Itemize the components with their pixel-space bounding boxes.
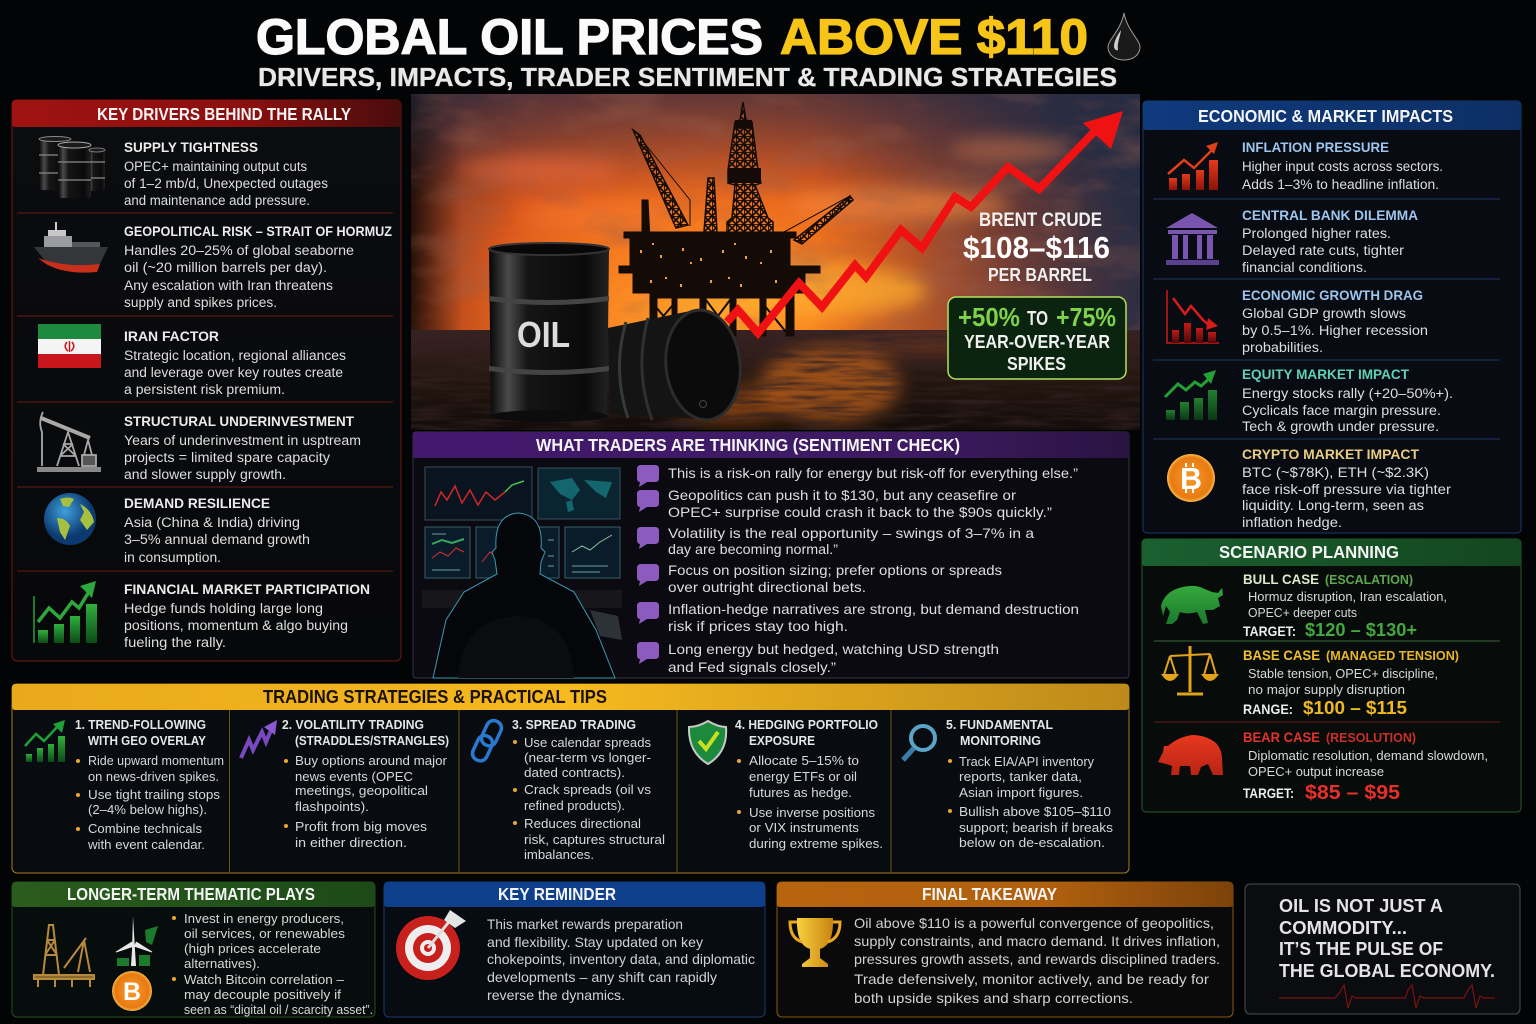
impact: crypto market: BTC (~$78K), ETH (~$2.3K) (1242, 465, 1429, 480)
driver: supply tightness: of 1–2 mb/d, Unexpected outages (124, 176, 328, 191)
strategy 1: trend-following (25, 717, 224, 852)
sentiment quotes (637, 465, 1079, 675)
impact: economic growth drag: by 0.5–1%. Higher recession (1242, 323, 1428, 338)
driver: iran factor: Strategic location, regional alliances (124, 348, 346, 363)
strategy 5: fundamental monitoring: below on de-escalation. (959, 836, 1105, 850)
callout: year-over-year spikes (948, 297, 1126, 379)
title: GLOBAL OIL PRICES (256, 9, 763, 65)
heading: scenario planning: SCENARIO PLANNING (1219, 542, 1399, 562)
strategy 3: spread trading (470, 717, 665, 862)
scenario: base case: no major supply disruption (1248, 683, 1405, 697)
driver: structural underinvestment: projects = limited spare capacity (124, 450, 330, 465)
impact: inflation pressure: INFLATION PRESSURE (1242, 139, 1389, 155)
upright oil barrel: OIL (517, 314, 570, 355)
sentiment quotes: and Fed signals closely.” (668, 659, 836, 675)
callout: year-over-year spikes: SPIKES (1007, 354, 1066, 374)
strategy 2: volatility trading: flashpoints). (295, 800, 369, 814)
driver: supply tightness: OPEC+ maintaining output cuts (124, 159, 307, 174)
scenario: bull case (1161, 571, 1447, 640)
scenario: bull case: $120 – $130+ (1305, 620, 1417, 640)
impact: inflation pressure: Adds 1–3% to headline inflation. (1242, 177, 1439, 192)
driver: geopolitical risk: supply and spikes prices. (124, 295, 277, 310)
icon: scales (1163, 646, 1217, 694)
impact: crypto market: liquidity. Long-term, seen as (1242, 498, 1424, 513)
brent crude price label: $108–$116 (963, 230, 1110, 265)
impact: crypto market: face risk-off pressure via tighter (1242, 482, 1452, 497)
heading: impacts: ECONOMIC & MARKET IMPACTS (1198, 106, 1453, 126)
icon: bull (1161, 586, 1223, 624)
icon: iran flag (38, 324, 101, 368)
quote text: COMMODITY... (1279, 918, 1407, 938)
strategy 4: hedging portfolio exposure: Allocate 5–15% to (749, 754, 859, 768)
strategy 4: hedging portfolio exposure: energy ETFs or oil (749, 770, 857, 784)
sentiment quotes: OPEC+ surprise could crash it back to the $90s quickly.” (668, 504, 1052, 520)
thematic bullet text: may decouple positively if (184, 988, 342, 1002)
icon: tanker ship (34, 222, 108, 273)
strategy 5: fundamental monitoring: support; bearish if breaks (959, 821, 1113, 835)
driver: demand resilience (44, 493, 310, 565)
driver: iran factor: a persistent risk premium. (124, 382, 285, 397)
driver: structural underinvestment (37, 412, 361, 482)
driver: structural underinvestment: Years of underinvestment in usptream (124, 433, 361, 448)
icon: gold oil rig (34, 925, 94, 987)
quote text: IT’S THE PULSE OF (1279, 939, 1443, 959)
icon: bitcoin coin: B (1180, 461, 1202, 496)
scenario: bear case: OPEC+ output increase (1248, 765, 1384, 779)
strategy 1: trend-following: (2–4% below highs). (88, 803, 207, 817)
strategy 4: hedging portfolio exposure: 4. HEDGING PORTFOLIO (735, 717, 878, 732)
strategy 1: trend-following: Use tight trailing stops (88, 788, 220, 802)
scenario: bull case: Hormuz disruption, Iran escalation, (1248, 590, 1447, 604)
impact: economic growth drag: probabilities. (1242, 340, 1323, 355)
strategy 4: hedging portfolio exposure: futures as hedge. (749, 786, 852, 800)
panel: economic and market impacts (1143, 101, 1521, 533)
icon: green chart (25, 720, 65, 762)
strategy 3: spread trading: refined products). (524, 799, 625, 813)
icon: trophy (790, 918, 840, 967)
takeaway text: pressures growth assets, and rewards disciplined traders. (854, 951, 1220, 967)
strategy 2: volatility trading (241, 717, 449, 850)
brent crude price label: BRENT CRUDE (979, 210, 1102, 231)
strategy 5: fundamental monitoring: reports, tanker data, (959, 770, 1082, 784)
driver: demand resilience: 3–5% annual demand growth (124, 532, 310, 547)
driver: supply tightness: and maintenance add pressure. (124, 193, 310, 208)
panel: scenario planning (1142, 539, 1521, 812)
thematic bullet text: alternatives). (184, 957, 260, 971)
title: ABOVE $110 (780, 9, 1088, 65)
callout: year-over-year spikes: YEAR-OVER-YEAR (964, 332, 1110, 352)
scenario: bull case: BULL CASE (1243, 571, 1319, 587)
driver: iran factor: IRAN FACTOR (124, 328, 219, 344)
title (256, 9, 1088, 65)
icon: bitcoin coin (112, 971, 152, 1011)
quote text: OIL IS NOT JUST A (1279, 896, 1443, 916)
strategy 4: hedging portfolio exposure: during extreme spikes. (749, 837, 883, 851)
scenario: bear case (1158, 729, 1488, 804)
icon: wind turbine (116, 916, 158, 966)
panel: key drivers (12, 100, 401, 661)
icon: shield (689, 721, 726, 764)
heading: thematic plays: LONGER-TERM THEMATIC PLAYS (67, 884, 315, 904)
strategy 2: volatility trading: Buy options around major (295, 754, 447, 768)
pulse line (1279, 985, 1495, 1008)
impact: central bank dilemma: Prolonged higher rates. (1242, 226, 1391, 241)
reminder text (487, 916, 755, 1003)
heading: final takeaway: FINAL TAKEAWAY (922, 884, 1057, 904)
driver: geopolitical risk: oil (~20 million barrels per day). (124, 260, 327, 275)
panel: longer-term thematic plays (12, 882, 375, 1017)
strategy 5: fundamental monitoring (903, 717, 1113, 850)
sentiment quotes: Geopolitics can push it to $130, but any ceasefire or (668, 487, 1016, 503)
impact: crypto market: CRYPTO MARKET IMPACT (1242, 446, 1419, 462)
strategy 5: fundamental monitoring: Bullish above $105–$110 (959, 805, 1111, 819)
sentiment quotes: risk if prices stay too high. (668, 618, 848, 634)
driver: geopolitical risk (34, 222, 392, 310)
impact: equity market: Tech & growth under pressure. (1242, 419, 1439, 434)
strategy 2: volatility trading: in either direction. (295, 836, 407, 850)
scenario: bear case: (RESOLUTION) (1326, 731, 1416, 745)
panel: key reminder (384, 882, 765, 1017)
scenario: bear case: TARGET: (1243, 785, 1294, 801)
thematic bullet text: Watch Bitcoin correlation – (184, 973, 344, 987)
impact: central bank dilemma: CENTRAL BANK DILEMMA (1242, 207, 1418, 223)
scenario: base case: RANGE: (1243, 701, 1293, 717)
fallen oil barrel (608, 306, 746, 424)
icon: rising green chart (1165, 370, 1217, 420)
driver: geopolitical risk: GEOPOLITICAL RISK – STRAIT OF HORMUZ (124, 223, 392, 239)
reminder text: and flexibility. Stay updated on key (487, 934, 703, 950)
rig silhouette (619, 102, 853, 336)
strategy 2: volatility trading: meetings, geopolitical (295, 784, 428, 798)
strategy 5: fundamental monitoring: MONITORING (960, 733, 1041, 748)
strategy 1: trend-following: Ride upward momentum (88, 754, 224, 768)
thematic bullet text: Invest in energy producers, (184, 912, 344, 926)
sentiment quotes: Volatility is the real opportunity – swings of 3–7% in a (668, 525, 1034, 541)
impact: equity market: EQUITY MARKET IMPACT (1242, 366, 1409, 382)
reminder text: reverse the dynamics. (487, 987, 625, 1003)
driver: supply tightness (39, 136, 328, 208)
heading: sentiment: WHAT TRADERS ARE THINKING (SENTIMENT CHECK) (536, 435, 960, 455)
scenario: base case: Stable tension, OPEC+ discipline, (1248, 667, 1438, 681)
subtitle: DRIVERS, IMPACTS, TRADER SENTIMENT & TRADING STRATEGIES (258, 62, 1117, 92)
driver: supply tightness: SUPPLY TIGHTNESS (124, 139, 258, 155)
impact: economic growth drag: ECONOMIC GROWTH DRAG (1242, 287, 1423, 303)
strategy 3: spread trading: Crack spreads (oil vs (524, 783, 651, 797)
icon: chain link (470, 718, 504, 763)
heading: key drivers: KEY DRIVERS BEHIND THE RALLY (97, 104, 351, 124)
strategy 3: spread trading: Use calendar spreads (524, 736, 651, 750)
strategy 4: hedging portfolio exposure: or VIX instruments (749, 821, 859, 835)
icon: magnifier (903, 726, 935, 760)
scenario: bear case: $85 – $95 (1305, 782, 1400, 804)
strategy 1: trend-following: 1. TREND-FOLLOWING (75, 717, 206, 732)
impact: equity market (1165, 366, 1453, 434)
icon: purple zigzag (241, 720, 277, 758)
scenario: bear case: Diplomatic resolution, demand slowdown, (1248, 749, 1488, 763)
driver: iran factor: and leverage over key routes create (124, 365, 343, 380)
icon: falling chart (1167, 290, 1219, 343)
panel: final takeaway (777, 882, 1233, 1017)
scenario: base case: BASE CASE (1243, 647, 1320, 663)
strategy 4: hedging portfolio exposure (689, 717, 883, 851)
driver: demand resilience: Asia (China & India) driving (124, 515, 300, 530)
strategy 3: spread trading: (near-term vs longer- (524, 751, 651, 765)
strategy 2: volatility trading: Profit from big moves (295, 820, 427, 834)
takeaway text (854, 915, 1220, 1006)
panel: sentiment check (413, 432, 1129, 678)
scenario: bear case: BEAR CASE (1243, 729, 1320, 745)
strategy 1: trend-following: on news-driven spikes. (88, 770, 219, 784)
strategy 1: trend-following: with event calendar. (87, 838, 205, 852)
reminder text: developments – any shift can rapidly (487, 969, 717, 985)
driver: financial market participation: FINANCIAL MARKET PARTICIPATION (124, 581, 370, 597)
strategy 3: spread trading: dated contracts). (524, 766, 625, 780)
impact: central bank dilemma (1166, 207, 1418, 275)
impact: equity market: Energy stocks rally (+20–50%+). (1242, 386, 1453, 401)
heading: key reminder: KEY REMINDER (498, 884, 616, 904)
callout: year-over-year spikes: +75% (1056, 302, 1116, 332)
strategy 3: spread trading: 3. SPREAD TRADING (512, 717, 636, 732)
takeaway text: Oil above $110 is a powerful convergence of geopolitics, (854, 915, 1214, 931)
quote text: THE GLOBAL ECONOMY. (1279, 961, 1495, 981)
reminder text: This market rewards preparation (487, 916, 683, 932)
impact: inflation pressure (1168, 139, 1443, 192)
impact: economic growth drag (1167, 287, 1428, 355)
scenario: bull case: TARGET: (1243, 623, 1296, 639)
driver: iran factor (38, 324, 346, 397)
thematic bullet text (172, 912, 373, 1017)
illustration: trader at monitors (422, 467, 622, 678)
upright oil barrel (489, 243, 609, 422)
strategy 2: volatility trading: 2. VOLATILITY TRADING (282, 717, 424, 732)
strategy 2: volatility trading: (STRADDLES/STRANGLES) (295, 733, 449, 748)
quote text (1279, 896, 1495, 981)
icon: bank building (1166, 213, 1219, 265)
icon: pumpjack (37, 412, 101, 472)
scenario: base case: $100 – $115 (1303, 698, 1407, 718)
takeaway text: both upside spikes and sharp corrections. (854, 990, 1133, 1006)
impact: equity market: Cyclicals face margin pressure. (1242, 403, 1441, 418)
strategy 4: hedging portfolio exposure: EXPOSURE (749, 733, 815, 748)
strategy 3: spread trading: Reduces directional (524, 817, 641, 831)
strategy 2: volatility trading: news events (OPEC (295, 770, 413, 784)
heading: trading strategies: TRADING STRATEGIES & PRACTICAL TIPS (263, 687, 607, 707)
thematic bullet text: oil services, or renewables (184, 927, 345, 941)
strategy 1: trend-following: Combine technicals (88, 822, 202, 836)
icon: globe (44, 493, 96, 545)
impact: crypto market (1167, 446, 1452, 530)
driver: structural underinvestment: STRUCTURAL UNDERINVESTMENT (124, 413, 354, 429)
icon: barrels (39, 136, 105, 198)
thematic bullet text: seen as “digital oil / scarcity asset”. (184, 1003, 373, 1017)
strategy 5: fundamental monitoring: 5. FUNDAMENTAL (946, 717, 1053, 732)
scenario: base case (1163, 646, 1459, 718)
strategy 3: spread trading: imbalances. (524, 848, 594, 862)
strategy 1: trend-following: WITH GEO OVERLAY (88, 733, 206, 748)
icon: bitcoin coin (1167, 454, 1215, 502)
driver: geopolitical risk: Any escalation with Iran threatens (124, 278, 333, 293)
icon: bitcoin coin: B (123, 978, 141, 1006)
sentiment quotes: day are becoming normal.” (668, 541, 838, 557)
arrow: rising price line (727, 111, 1123, 333)
driver: structural underinvestment: and slower supply growth. (124, 467, 286, 482)
icon: target and dart (396, 910, 466, 980)
panel: pulse quote (1245, 884, 1520, 1014)
driver: demand resilience: DEMAND RESILIENCE (124, 495, 270, 511)
strategy 5: fundamental monitoring: Asian import figures. (959, 786, 1083, 800)
impact: inflation pressure: Higher input costs across sectors. (1242, 159, 1443, 174)
scenario: bull case: OPEC+ deeper cuts (1248, 606, 1357, 620)
hero image: offshore rig at sunset (411, 94, 1140, 430)
sentiment quotes: This is a risk-on rally for energy but risk-off for everything else.” (668, 465, 1078, 481)
sentiment quotes: Long energy but hedged, watching USD strength (668, 641, 999, 657)
scenario: bull case: (ESCALATION) (1325, 573, 1413, 587)
icon: oil drop (1108, 13, 1140, 60)
brent crude price label (963, 210, 1110, 285)
driver: financial market participation: Hedge funds holding large long (124, 601, 323, 616)
callout: year-over-year spikes: +50% (958, 302, 1020, 332)
driver: financial market participation: positions, momentum & algo buying (124, 618, 348, 633)
impact: economic growth drag: Global GDP growth slows (1242, 306, 1406, 321)
takeaway text: supply constraints, and macro demand. It drives inflation, (854, 933, 1220, 949)
strategy 4: hedging portfolio exposure: Use inverse positions (749, 806, 875, 820)
thematic bullet text: (high prices accelerate (184, 942, 321, 956)
brent crude price label: PER BARREL (988, 265, 1092, 285)
scenario: base case: (MANAGED TENSION) (1326, 649, 1459, 663)
strategy 5: fundamental monitoring: Track EIA/API inventory (959, 755, 1095, 769)
panel: trading strategies (12, 684, 1129, 873)
sentiment quotes: Inflation-hedge narratives are strong, but demand destruction (668, 601, 1079, 617)
impact: crypto market: inflation hedge. (1242, 515, 1342, 530)
driver: financial market participation (33, 581, 370, 650)
strategy 3: spread trading: risk, captures structural (524, 833, 665, 847)
sentiment quotes: Focus on position sizing; prefer options or spreads (668, 562, 1002, 578)
impact: central bank dilemma: Delayed rate cuts, tighter (1242, 243, 1405, 258)
reminder text: chokepoints, inventory data, and diplomatic (487, 951, 755, 967)
icon: rising red chart (1168, 142, 1218, 190)
driver: demand resilience: in consumption. (124, 550, 221, 565)
callout: year-over-year spikes: TO (1027, 308, 1048, 330)
impact: central bank dilemma: financial conditions. (1242, 260, 1367, 275)
icon: growth chart (33, 581, 97, 643)
driver: financial market participation: fueling the rally. (124, 635, 226, 650)
sentiment quotes: over outright directional bets. (668, 579, 866, 595)
icon: bear (1158, 735, 1223, 775)
takeaway text: Trade defensively, monitor actively, and be ready for (854, 971, 1209, 987)
driver: geopolitical risk: Handles 20–25% of global seaborne (124, 243, 354, 258)
